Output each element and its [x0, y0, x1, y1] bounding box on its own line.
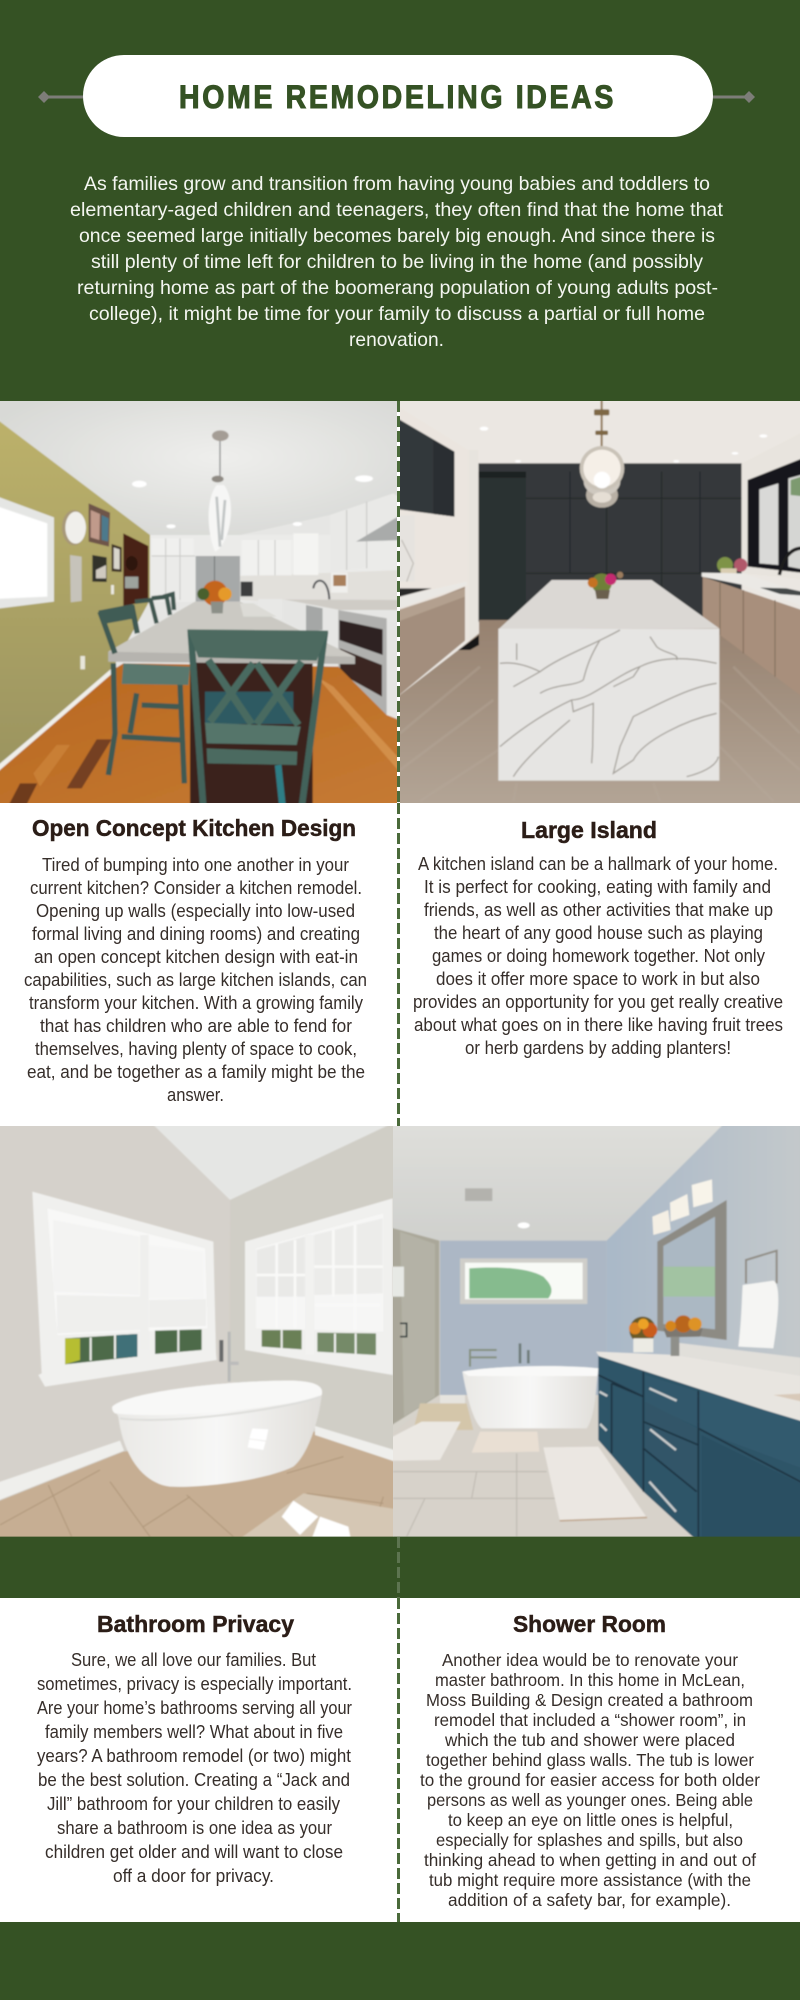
- faucet: [779, 548, 800, 575]
- plants: [717, 557, 733, 573]
- text block: shower room: tub might require more assistance (with the: [429, 1870, 751, 1890]
- text block: shower room: to the ground for easier access for both older: [420, 1770, 760, 1790]
- text block: large island: A kitchen island can be a hallmark of your home.: [418, 854, 778, 874]
- text block: shower room: to keep an eye on little ones is helpful,: [448, 1810, 733, 1830]
- floor sun highlights: [282, 1501, 318, 1535]
- intro paragraph: As families grow and transition from having young babies and toddlers to: [84, 173, 710, 195]
- panel: shower room: [400, 1598, 800, 1922]
- text block: shower room: thinking ahead to when getting in and out of: [424, 1850, 756, 1870]
- sink: [773, 1393, 800, 1403]
- island: [190, 662, 313, 808]
- header connector: right: [712, 91, 755, 103]
- tub: [117, 1396, 322, 1488]
- text block: open concept kitchen design: current kitchen? Consider a kitchen remodel.: [30, 878, 362, 898]
- text block: shower room: which the tub and shower were placed: [444, 1730, 735, 1750]
- text block: large island: games or doing homework together. Not only: [432, 946, 765, 966]
- text block: large island: or herb gardens by adding planters!: [465, 1038, 731, 1058]
- pictures on wall: [0, 495, 54, 609]
- middle dashed divider: [397, 803, 400, 1126]
- right window: [245, 1198, 393, 1375]
- flowers: [629, 1317, 656, 1343]
- text block: open concept kitchen design: [24, 855, 367, 1105]
- pendant: [219, 435, 221, 478]
- mirror: [657, 1200, 727, 1340]
- vanity: [598, 1356, 800, 1543]
- text block: open concept kitchen design: an open concept kitchen design with eat-in: [34, 947, 358, 967]
- intro paragraph: still plenty of time left for children to be living in the home (and possibly: [91, 251, 703, 273]
- lights: [480, 427, 488, 431]
- title banner: HOME REMODELING IDEAS: [179, 79, 616, 115]
- text block: open concept kitchen design: Opening up walls (especially into low-used: [36, 901, 355, 921]
- backsplash and counter: [677, 1343, 800, 1377]
- text block: bathroom privacy: be the best solution. Creating a “Jack and: [38, 1770, 350, 1790]
- text block: large island: does it offer more space to work in but also: [436, 969, 760, 989]
- back wall: [478, 463, 742, 622]
- left window: [32, 1192, 217, 1387]
- text block: shower room: Moss Building & Design created a bathroom: [426, 1690, 753, 1710]
- range and lower cabinets: [288, 600, 397, 610]
- doorway: [123, 533, 148, 607]
- text block: bathroom privacy: years? A bathroom remodel (or two) might: [37, 1746, 351, 1766]
- text block: shower room: Another idea would be to renovate your: [442, 1650, 738, 1670]
- faucet: [313, 581, 329, 599]
- near left chair: [100, 605, 184, 783]
- floor: [393, 620, 800, 808]
- text block: large island: friends, as well as other activities that make up: [424, 900, 773, 920]
- intro paragraph: returning home as part of the boomerang population of young adults post-: [77, 277, 718, 299]
- text block: shower room: especially for splashes and spills, but also: [436, 1830, 743, 1850]
- floor: [0, 663, 404, 808]
- title banner: [83, 55, 713, 137]
- heading: bathroom privacy: Bathroom Privacy: [97, 1611, 294, 1637]
- photo: vanity bathroom: [386, 1120, 800, 1543]
- tub: [462, 1366, 598, 1428]
- text block: open concept kitchen design: themselves, having plenty of space to cook,: [35, 1039, 357, 1059]
- white strip behind divider: [396, 401, 401, 803]
- text block: large island: about what goes on in there like having fruit trees: [414, 1015, 783, 1035]
- text block: bathroom privacy: Are your home’s bathrooms serving all your: [37, 1698, 352, 1718]
- far chairs: [135, 594, 174, 623]
- flowers: [202, 581, 228, 606]
- intro paragraph: elementary-aged children and teenagers, they often find that the home that: [70, 199, 724, 221]
- text block: bathroom privacy: [37, 1650, 352, 1886]
- text block: bathroom privacy: share a bathroom is one idea as your: [57, 1818, 332, 1838]
- text block: large island: It is perfect for cooking, eating with family and: [424, 877, 771, 897]
- text block: open concept kitchen design: eat, and be together as a family might be the: [27, 1062, 365, 1082]
- text block: bathroom privacy: sometimes, privacy is especially important.: [37, 1674, 352, 1694]
- lower dashed divider: [397, 1598, 400, 1922]
- heading: open concept kitchen design: Open Concept Kitchen Design: [32, 815, 356, 841]
- flowers: [592, 573, 612, 593]
- text block: open concept kitchen design: that has children who are able to fend for: [40, 1016, 352, 1036]
- photo: freestanding tub by windows: [0, 1120, 400, 1543]
- near chair: [191, 630, 325, 808]
- vanity lights: [652, 1210, 671, 1235]
- intro paragraph: [70, 173, 724, 351]
- text block: shower room: [420, 1650, 760, 1910]
- window: [460, 1258, 587, 1304]
- text block: open concept kitchen design: capabilities, such as large kitchen islands, can: [24, 970, 367, 990]
- text block: open concept kitchen design: Tired of bumping into one another in your: [42, 855, 349, 875]
- text block: shower room: remodel that included a “shower room”, in: [434, 1710, 746, 1730]
- lights: [132, 481, 147, 487]
- text block: large island: [413, 854, 783, 1058]
- heading: large island: Large Island: [521, 817, 657, 843]
- panel: open concept kitchen design: [0, 803, 400, 1126]
- back cabinets: [150, 535, 404, 602]
- upper dashed divider: [397, 401, 400, 803]
- left cabinets: [400, 586, 466, 696]
- header connector: left: [38, 91, 86, 103]
- text block: open concept kitchen design: answer.: [167, 1085, 224, 1105]
- island: [498, 580, 719, 629]
- panel: bathroom privacy: [0, 1598, 400, 1922]
- rugs: [386, 1422, 461, 1461]
- text block: shower room: persons as well as younger ones. Being able: [427, 1790, 753, 1810]
- text block: shower room: master bathroom. In this home in McLean,: [435, 1670, 745, 1690]
- text block: bathroom privacy: children get older and will want to close: [45, 1842, 343, 1862]
- towel bar: [470, 1350, 497, 1367]
- right cabinets: [702, 576, 800, 683]
- text block: open concept kitchen design: formal living and dining rooms) and creating: [32, 924, 360, 944]
- baseboards: [0, 1441, 124, 1502]
- left wall: [478, 472, 480, 619]
- text block: large island: the heart of any good house such as playing: [434, 923, 763, 943]
- pendant: [601, 393, 603, 450]
- fridge: [196, 556, 240, 602]
- text block: bathroom privacy: off a door for privacy.: [113, 1866, 274, 1886]
- photo: large island kitchen: [393, 393, 800, 808]
- text block: large island: provides an opportunity for you get really creative: [413, 992, 783, 1012]
- heading: shower room: Shower Room: [513, 1611, 666, 1637]
- photo: open concept kitchen: [0, 393, 404, 808]
- text block: bathroom privacy: Jill” bathroom for your children to easily: [47, 1794, 340, 1814]
- floor: [0, 1432, 400, 1543]
- text block: open concept kitchen design: transform your kitchen. With a growing family: [29, 993, 363, 1013]
- shower: [393, 1228, 440, 1425]
- text block: shower room: addition of a safety bar, for example).: [448, 1890, 731, 1910]
- right wall and window: [740, 464, 742, 573]
- floor: [464, 1394, 600, 1398]
- panel: large island: [400, 803, 800, 1126]
- intro paragraph: renovation.: [349, 329, 444, 351]
- faucet: [228, 1332, 231, 1382]
- text block: shower room: together behind glass walls. The tub is lower: [426, 1750, 754, 1770]
- towel ring and towel: [746, 1251, 777, 1283]
- intro paragraph: college), it might be time for your family to discuss a partial or full home: [89, 303, 705, 325]
- intro paragraph: once seemed large initially becomes barely big enough. And since there is: [79, 225, 715, 247]
- text block: bathroom privacy: family members well? What about in five: [45, 1722, 343, 1742]
- text block: bathroom privacy: Sure, we all love our families. But: [71, 1650, 316, 1670]
- green band with faint divider: [0, 1537, 800, 1598]
